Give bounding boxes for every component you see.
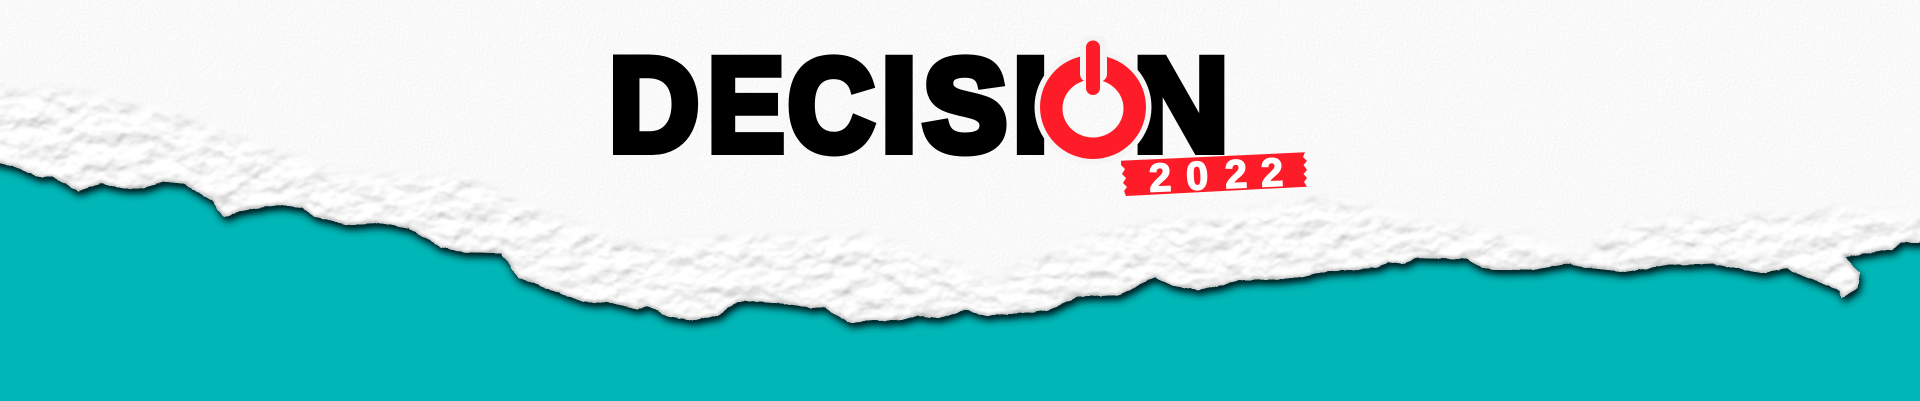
- wordmark letters: N: [1133, 31, 1229, 180]
- power icon letter O: O: [1042, 27, 1144, 173]
- wordmark letters: I: [1012, 31, 1049, 180]
- rough torn band: [0, 88, 1920, 323]
- red tape with year: 2022: [1148, 151, 1284, 201]
- wordmark letters: E: [707, 29, 785, 180]
- wordmark letters: S: [923, 34, 1007, 179]
- wordmark letters: I: [880, 31, 918, 180]
- torn edge shading: [0, 160, 1920, 323]
- wordmark letters: D: [609, 31, 699, 179]
- wordmark letters: C: [788, 33, 874, 178]
- wordmark letters: [609, 29, 1229, 180]
- logo: DECISION 2022: [609, 27, 1307, 201]
